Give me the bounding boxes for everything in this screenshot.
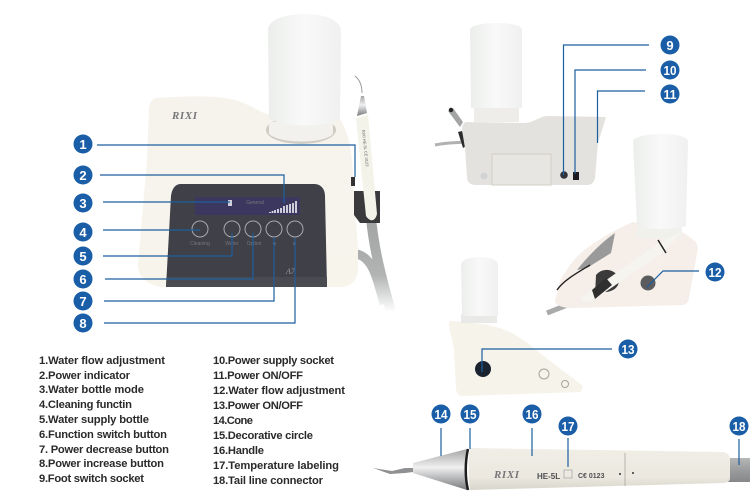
power level bars [270,201,296,213]
number badges 1 to 8: 1 [79,137,87,152]
button labels: ► [293,241,297,247]
parts legend column 1: 1.Water flow adjustment [39,355,165,367]
number badges 1 to 8: 2 [79,168,87,183]
side holder [595,270,619,296]
number badges 9 to 11: 10 [664,63,676,78]
decorative ring [466,449,468,490]
decorative circles [539,369,568,388]
handle body [468,448,730,490]
number badges 1 to 8: 4 [79,225,87,240]
parts legend column 2: 14.Cone [213,415,253,427]
angled screen [577,233,615,270]
rear body [462,116,606,185]
water bottle [268,14,341,126]
number badge 12: 12 [708,265,722,280]
cone [413,449,467,490]
LCD text: General [246,200,264,206]
rear hose [435,142,464,145]
parts legend column 2: 17.Temperature labeling [213,460,339,472]
handle logo: RIXI [493,469,520,481]
number badges 14 to 18: 16 [526,407,538,422]
side grip [592,278,612,299]
parts legend column 1: 7. Power decrease button [39,444,169,456]
parts legend column 2: 12.Water flow adjustment [213,385,345,397]
certification mark: C€ 0123 [578,473,605,480]
parts legend column 2: 13.Power ON/OFF [213,400,303,412]
control panel [166,184,327,287]
number badges 14 to 18: 15 [464,407,476,422]
handpiece body [356,115,377,220]
handle dots [619,472,634,475]
callout lines 1 to 8 [97,145,355,323]
number badges 14 to 18: 17 [562,419,574,434]
number badges 14 to 18 [432,404,748,436]
parts legend column 1: 3.Water bottle mode [39,384,144,396]
side bottle [633,134,688,229]
number badges 9 to 11: 9 [666,38,674,53]
parts legend column 2: 10.Power supply socket [213,355,334,367]
bottle collar [266,116,336,144]
rear hatch [492,154,551,185]
parts legend column 1: 5.Water supply bottle [39,414,149,426]
parts legend column 1: 9.Foot switch socket [39,473,144,485]
handle seam [624,453,626,486]
rear indicator [480,172,488,180]
water bottle mode icon [228,200,232,206]
panel buttons [192,221,303,237]
number badges 1 to 8: 7 [79,294,87,309]
handpiece illustration [373,448,750,490]
model label: A7 [285,267,296,276]
side body [555,222,698,308]
rear collar [474,108,519,122]
handpiece cone [357,96,367,116]
side switch [351,177,355,186]
button labels: ◄ [272,241,276,247]
LCD display [195,197,300,215]
rear bottle [470,23,522,108]
side collar [637,225,682,239]
handpiece ring [658,240,666,253]
power knob [475,361,491,377]
button labels: Option [247,241,262,247]
parts legend column 2: 18.Tail line connector [213,475,324,487]
side handpiece [581,232,682,302]
profile body [449,321,583,396]
temperature label [564,470,572,478]
button labels [190,241,297,247]
handpiece holder [354,191,380,223]
foot switch socket [560,171,568,179]
parts legend column 1: 8.Power increase button [39,458,164,470]
number badges 9 to 11 [660,36,680,104]
parts legend column 2: 16.Handle [213,445,264,457]
handpiece markings: RIXI HE-5L CE 0123 [361,130,370,167]
tubes [357,218,391,312]
scaler tip [373,468,413,474]
scaler tip [355,76,362,93]
number badge 12 [706,262,724,282]
parts legend column 1: 4.Cleaning functin [39,399,132,411]
number badges 9 to 11: 11 [664,87,676,102]
button labels: Cleaning [190,241,210,247]
main device body [138,96,358,287]
model text: HE-5L [537,472,560,481]
side tube [547,298,585,313]
number badges 1 to 8: 8 [79,316,87,331]
number badges 14 to 18: 18 [732,419,746,434]
parts legend column 2: 15.Decorative circle [213,430,313,442]
number badges 14 to 18: 14 [434,407,448,422]
angled side view device [547,134,698,313]
screen lower edge [557,265,590,290]
callout lines 9 to 11 [564,45,649,175]
tail tube [728,458,750,482]
parts legend column 1: 6.Function switch button [39,429,167,441]
callout line 12 [647,271,699,287]
number badge 13: 13 [622,342,634,357]
callout line 13 [482,349,612,372]
rear view device [435,23,606,185]
rear connector [448,108,463,127]
parts legend column 2 [213,355,345,487]
panel lower band [166,277,327,287]
number badges 1 to 8: 3 [79,196,87,211]
rear holder [458,131,466,148]
button labels: Water [225,241,239,247]
number badge 13 [618,340,638,358]
brand logo: RIXI [171,110,198,122]
side profile device [449,257,583,396]
water flow knob [640,276,656,290]
profile collar [461,314,497,323]
parts legend column 1 [39,355,169,485]
connector tip [449,108,453,112]
parts legend column 2: 11.Power ON/OFF [213,370,303,382]
number badges 1 to 8: 5 [79,249,87,264]
number badges 1 to 8 [74,134,92,332]
parts legend column 1: 2.Power indicator [39,370,131,382]
profile bottle [461,257,498,316]
number badges 1 to 8: 6 [79,272,87,287]
callout lines 14 to 18 [441,428,739,467]
power switch [573,172,579,180]
main device illustration [138,14,391,312]
